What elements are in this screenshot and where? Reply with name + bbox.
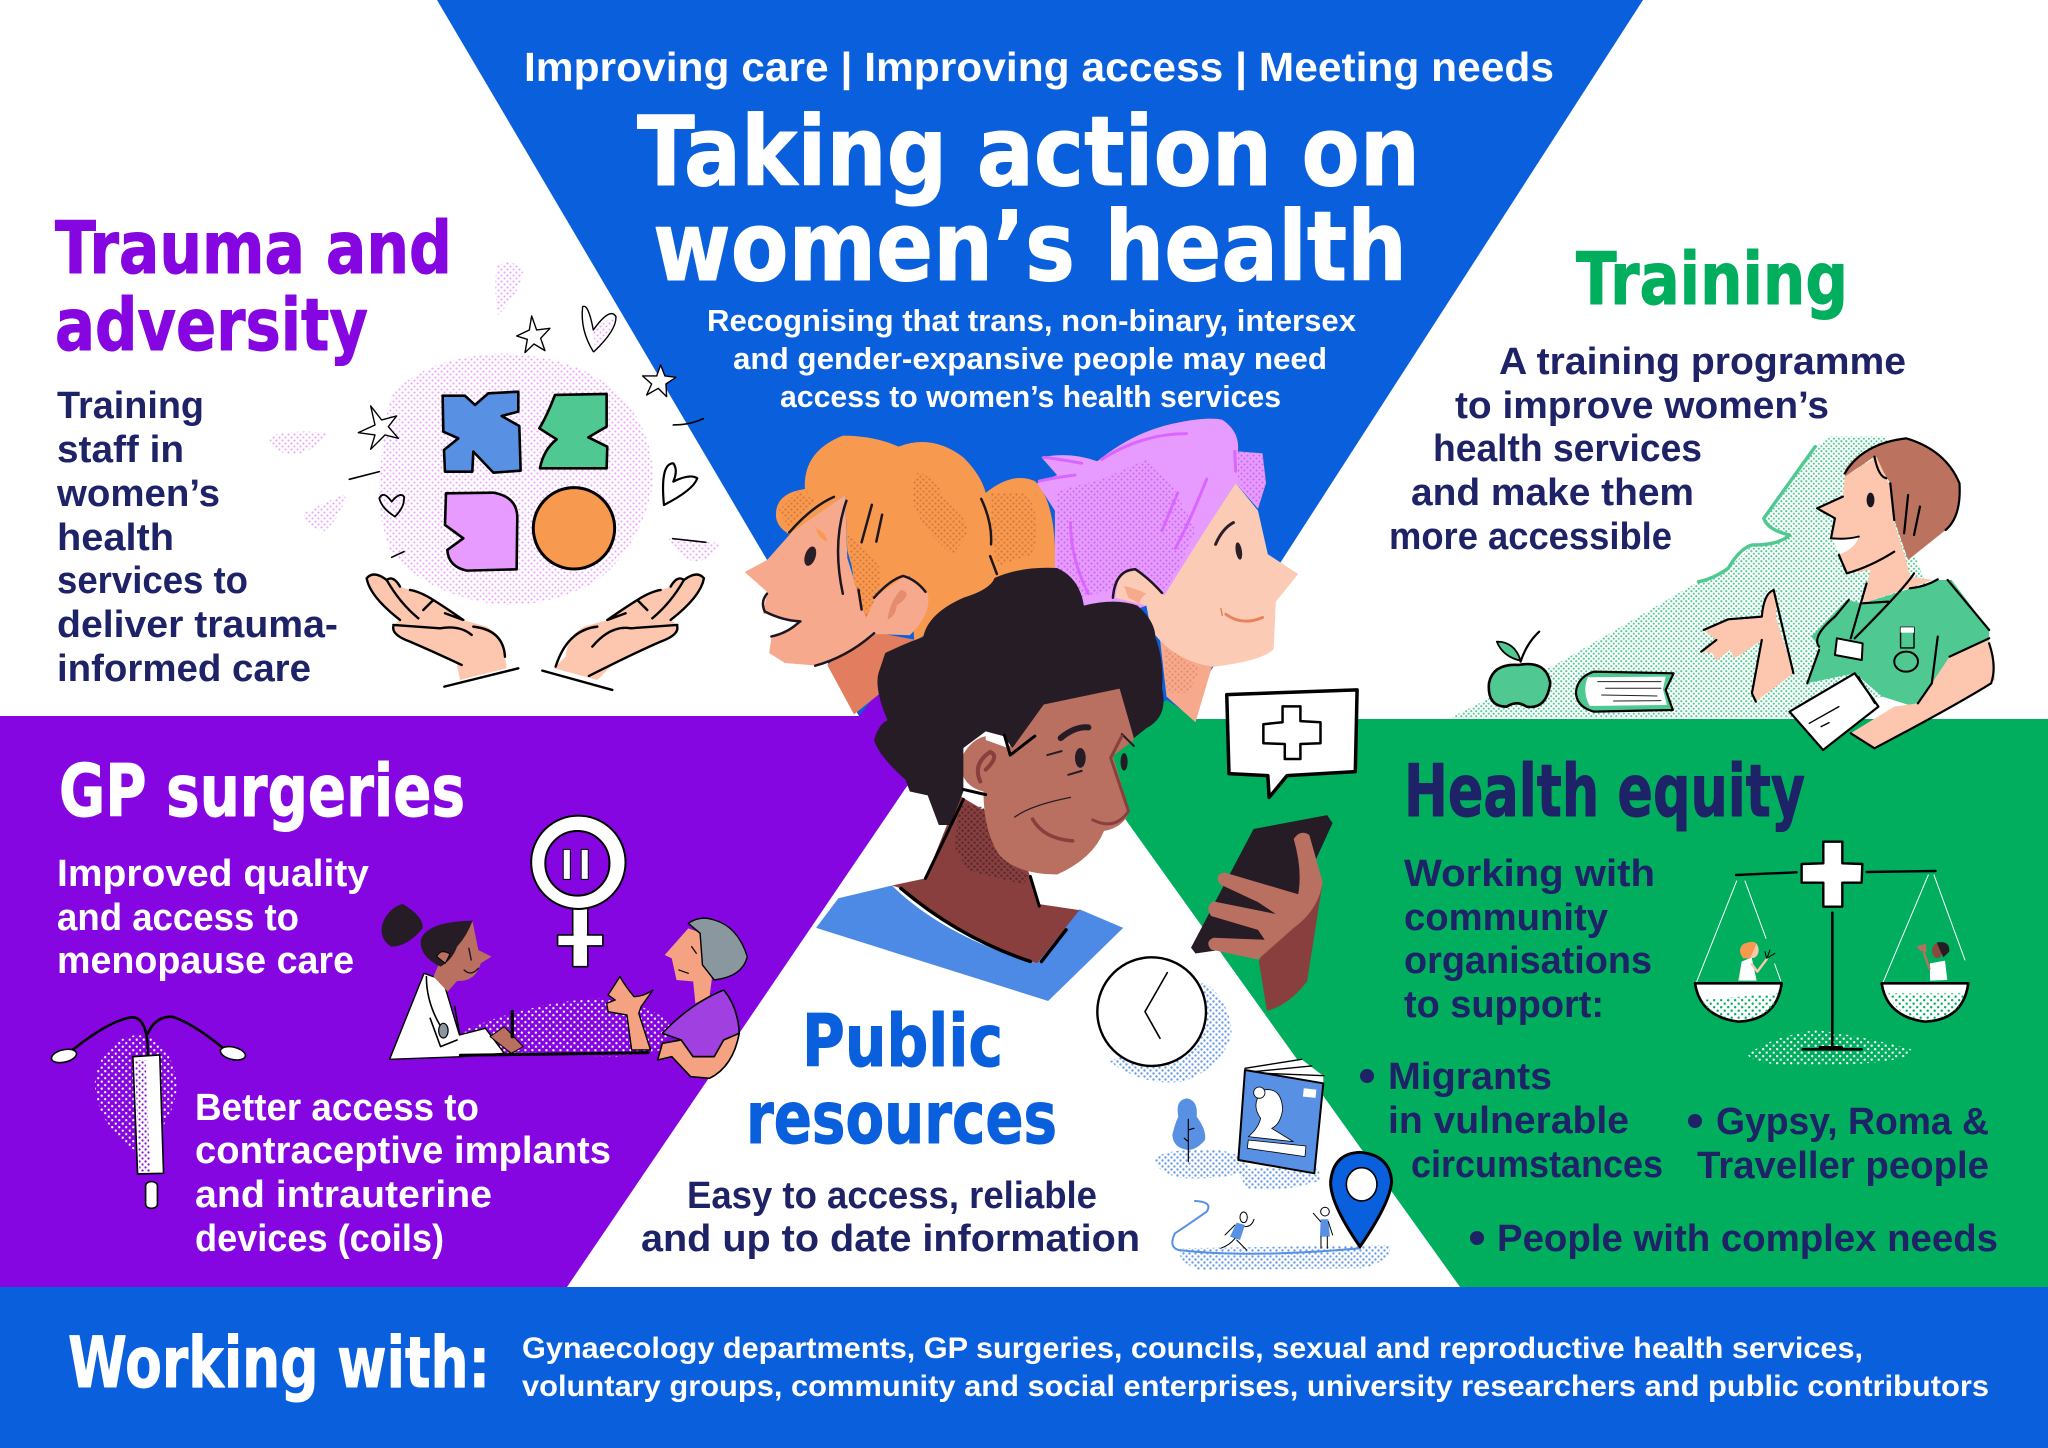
bullet: migrants: in vulnerable — [1388, 1100, 1629, 1142]
heading: Public resources — [746, 999, 1057, 1160]
text: contraceptive access: devices (coils) — [195, 1218, 444, 1260]
text: trauma training: Training — [57, 385, 204, 427]
title: women’s health — [653, 191, 1407, 303]
hand: left — [367, 575, 518, 687]
shape: green — [539, 394, 607, 468]
icon: apple — [1489, 632, 1550, 707]
figure: left pan person — [1738, 942, 1775, 981]
route with people and map pin — [1172, 1152, 1392, 1270]
text: training programme: health services — [1433, 428, 1702, 470]
text: community organisations — [1404, 853, 1655, 1026]
text: menopause care — [57, 853, 369, 982]
heading: Public resources: resources — [746, 1076, 1057, 1160]
text: training programme: A training programme — [1499, 341, 1906, 383]
halftone desk glow — [457, 998, 674, 1057]
text: contraceptive access: and intrauterine — [195, 1174, 492, 1216]
text: menopause care: Improved quality — [57, 853, 369, 895]
text: menopause care: menopause care — [57, 940, 354, 982]
stars, hearts and ticks — [349, 306, 706, 557]
text: training programme: to improve women’s — [1455, 385, 1829, 427]
panel: GP surgeries purple — [0, 690, 960, 1287]
bullet: Gypsy, Roma and Traveller people: Traveller people — [1697, 1145, 1989, 1187]
shape: lilac — [445, 493, 517, 571]
bullet: migrants: Migrants — [1388, 1056, 1552, 1098]
text: training programme — [1389, 341, 1906, 558]
heading: Public resources: Public — [802, 999, 1003, 1083]
bullet: people with complex needs: People with complex needs — [1497, 1218, 1998, 1260]
icon: leaflet — [1237, 1059, 1324, 1190]
heading: Trauma and adversity: adversity — [55, 283, 368, 367]
bullet: Gypsy, Roma and Traveller people — [1688, 1101, 1989, 1187]
text: training programme: and make them — [1411, 472, 1694, 514]
heading: Health equity: Health equity — [1404, 749, 1805, 833]
shape: orange circle — [533, 488, 615, 569]
intro text: and gender-expansive people may need — [733, 341, 1327, 376]
strapline: Improving care | Improving access | Meeting needs — [524, 44, 1554, 90]
text: public resources: and up to date information — [641, 1218, 1140, 1260]
icon: female symbol — [531, 816, 626, 967]
title — [637, 96, 1420, 303]
panel: bottom working with band — [0, 1287, 2048, 1448]
text: trauma training: deliver trauma- — [57, 604, 338, 646]
illustration: hands with shapes — [268, 262, 720, 690]
text: trauma training: health — [57, 517, 174, 559]
text: trauma training: services to — [57, 560, 248, 602]
icon: medical cross — [1802, 842, 1862, 907]
illustration: scales — [1695, 842, 1968, 1066]
icon: speech bubble with cross — [1227, 690, 1357, 797]
figure: walker — [1313, 1207, 1333, 1248]
text: contraceptive access: contraceptive implants — [195, 1130, 611, 1172]
head: lilac hair — [1037, 419, 1298, 722]
text: trauma training: staff in — [57, 429, 184, 471]
scale beam — [1736, 871, 1936, 875]
panel: health equity green — [1060, 700, 2048, 1287]
heading: Trauma and adversity — [55, 206, 452, 367]
icon: intrauterine device — [48, 1017, 248, 1208]
text: partners: voluntary groups, community and social enterprises, university researchers and public contributors — [522, 1370, 1989, 1403]
pan strings — [1697, 875, 1965, 982]
halftone background blobs — [268, 262, 720, 605]
title: Taking action on — [637, 96, 1420, 208]
bullet: migrants — [1360, 1056, 1663, 1186]
text: partners — [522, 1332, 1989, 1403]
heading: Training: Training — [1576, 237, 1848, 321]
text: contraceptive access: Better access to — [195, 1087, 479, 1129]
text: public resources: Easy to access, reliable — [687, 1175, 1097, 1217]
icon: book — [1576, 672, 1674, 712]
head: orange hair — [745, 436, 1055, 714]
illustration: public resources — [1097, 957, 1392, 1270]
halftone speech bubble — [1449, 437, 1954, 718]
text: trauma training — [56, 385, 338, 690]
person: doctor — [382, 904, 523, 1059]
shape: blue — [443, 392, 521, 473]
illustration: three heads — [745, 419, 1357, 1011]
text: trauma training: informed care — [57, 648, 311, 690]
person: patient — [607, 918, 747, 1078]
text: community organisations: Working with — [1404, 853, 1655, 895]
heading: GP surgeries: GP surgeries — [59, 749, 465, 833]
text: community organisations: to support: — [1404, 984, 1604, 1026]
icon: tree — [1155, 1098, 1250, 1178]
hand: right — [542, 575, 704, 690]
icon: clock — [1097, 957, 1232, 1082]
icon: map pin — [1331, 1152, 1392, 1247]
intro text — [707, 303, 1357, 414]
text: trauma training: women’s — [56, 473, 220, 515]
panel: top blue triangle — [437, 0, 1643, 720]
bullet: migrants: circumstances — [1411, 1144, 1663, 1186]
scale stand — [1803, 913, 1862, 1049]
text: contraceptive access — [195, 1087, 611, 1260]
text: community organisations: organisations — [1404, 940, 1652, 982]
heading: Trauma and adversity: Trauma and — [55, 206, 452, 290]
speech bubble edge — [1699, 447, 1815, 582]
illustration: GP consultation — [48, 816, 747, 1208]
figure: right pan person — [1917, 942, 1949, 981]
text: partners: Gynaecology departments, GP surgeries, councils, sexual and reproductive health services, — [522, 1332, 1863, 1365]
intro text: Recognising that trans, non-binary, intersex — [707, 303, 1357, 338]
pan: left — [1695, 983, 1782, 1022]
heading: Working with: Working with: — [68, 1322, 490, 1404]
illustration: training nurse — [1449, 437, 1995, 750]
bullet: Gypsy, Roma and Traveller people: Gypsy, Roma & — [1716, 1101, 1989, 1143]
text: community organisations: community — [1404, 897, 1608, 939]
text: public resources — [641, 1175, 1140, 1260]
icon: hand holding phone — [1191, 815, 1333, 1011]
figure: runner — [1221, 1212, 1254, 1250]
halftone ground — [1747, 1030, 1913, 1066]
pan: right — [1882, 983, 1968, 1022]
text: training programme: more accessible — [1389, 516, 1672, 558]
intro text: access to women’s health services — [780, 379, 1281, 414]
desk — [460, 1053, 648, 1055]
text: menopause care: and access to — [57, 897, 299, 939]
person: nurse — [1701, 438, 1995, 750]
person: woman with phone — [816, 568, 1164, 1001]
